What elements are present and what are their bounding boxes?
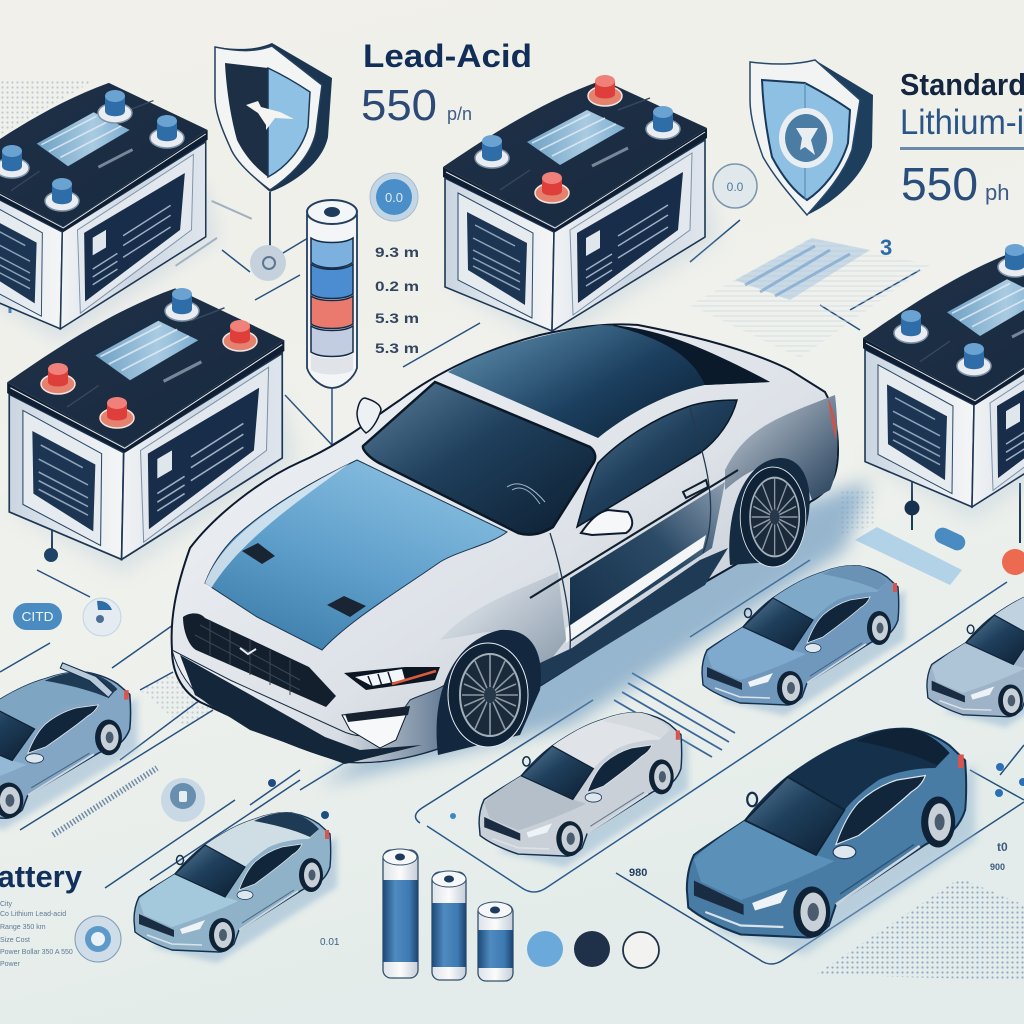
halftone dots: bottom right (815, 878, 1024, 980)
circle badge: right: 0.0 (727, 180, 744, 194)
headlight (344, 667, 440, 690)
hatch strip lower left (53, 768, 157, 835)
halftone dots: right side (840, 490, 875, 535)
battery: right (863, 248, 1024, 521)
number 3: 3 (880, 235, 892, 260)
circle badge: top center (370, 173, 418, 221)
divider under lithium heading (900, 147, 1024, 150)
hood vent left (242, 543, 275, 564)
car body (172, 324, 838, 762)
small car: large blue (687, 728, 975, 954)
battery text block: City (0, 901, 13, 908)
small car: lower left (134, 813, 337, 963)
circle badge: shield connector (250, 245, 286, 281)
battery: left front (7, 288, 298, 575)
connector lines and platforms (0, 192, 1024, 964)
value: lead-acid 550: p/n (447, 104, 472, 124)
front fender shading (440, 572, 566, 680)
battery text block: Co Lithium Lead-acid (0, 911, 66, 918)
small car: right blue (702, 566, 905, 716)
car shadow (320, 480, 870, 785)
shield: lead-acid (215, 43, 332, 192)
battery text block: Power (0, 961, 21, 968)
small label: right value: t0 (997, 840, 1008, 854)
door line (550, 408, 711, 650)
roof (448, 325, 770, 438)
front bumper (172, 650, 452, 763)
colour dot: navy (574, 931, 610, 967)
side mirror right (581, 510, 632, 535)
small label: cost near car: 980 (629, 867, 647, 879)
hood highlight (205, 463, 350, 590)
side character line (530, 470, 738, 598)
cylinder scale labels: 0.2 m (375, 278, 419, 294)
pill label: left CITD: CITD (22, 609, 54, 624)
rear spoiler (60, 663, 113, 698)
circle badge: top center: 0.0 (385, 190, 403, 205)
battery text block: Power Bollar 350 A 550 (0, 949, 73, 956)
small label: right value: 900 (990, 862, 1005, 872)
bottom cylinder: medium (432, 871, 466, 980)
terminals: left front battery (41, 288, 257, 428)
grille (183, 613, 336, 707)
small label: right value (990, 840, 1008, 872)
roof rear dark (610, 325, 770, 385)
rear quarter shading (725, 395, 837, 500)
terminals: right battery (894, 244, 1024, 376)
cylinder scale labels: 5.3 m (375, 310, 419, 326)
wiper arcs (507, 484, 545, 504)
colour dot: white (623, 932, 659, 968)
circle icon: left middle (83, 598, 121, 636)
small car: far left (0, 663, 138, 830)
lower front intake (342, 708, 409, 748)
circle badge: right (713, 164, 757, 208)
terminals: top center battery (475, 75, 680, 203)
main car: sports coupe (172, 324, 870, 785)
bottom cylinder: tall (383, 849, 418, 978)
grille mesh (195, 620, 300, 695)
cylinder scale labels: 9.3 m (375, 244, 419, 260)
side mirror left (357, 398, 381, 433)
value: lead-acid 550 (361, 81, 472, 130)
battery: top left (0, 83, 220, 343)
side window (577, 400, 737, 527)
value: lithium 550: 550 (901, 158, 978, 210)
battery text block: Range 350 km (0, 924, 46, 931)
circle icon: bottom left (75, 916, 121, 962)
battery text block: Size Cost (0, 937, 30, 944)
hatch lines (614, 673, 735, 757)
pill label: left CITD (13, 603, 62, 630)
white sill stripe (566, 535, 706, 643)
marker dots: connectors (44, 500, 1024, 819)
small label: lower left value: 0.01 (320, 937, 340, 948)
heading: lead-acid: Lead-Acid (363, 38, 532, 74)
cylinder scale labels: 5.3 m (375, 340, 419, 356)
cylinder scale labels (375, 244, 419, 356)
shield: lithium-ion (750, 60, 873, 215)
hood vent right (327, 596, 366, 617)
tail light (828, 398, 836, 440)
small car: silver (479, 713, 688, 867)
circle icon: lower left lock (161, 778, 205, 822)
colour dot: light blue (527, 931, 563, 967)
front wheel arch (437, 630, 541, 755)
pill badge: right (932, 525, 968, 553)
halftone dots: under main car left (140, 672, 213, 728)
hood (205, 460, 507, 650)
door panel lower (570, 482, 725, 642)
terminals: top left battery (0, 90, 184, 211)
bottom cylinder: short (478, 902, 513, 981)
windshield (363, 382, 595, 535)
battery: top center (443, 80, 720, 345)
pony badge (240, 648, 256, 654)
value: lead-acid 550: 550 (361, 81, 437, 130)
rear wheel arch (729, 458, 810, 565)
small labels: top left battery note (175, 200, 252, 267)
door handle (683, 480, 708, 498)
blueprint stripes panel (690, 238, 930, 358)
red badge: right (1002, 549, 1024, 575)
value: lithium 550: ph (985, 180, 1009, 205)
blue slip (855, 527, 962, 585)
small car: far right (927, 584, 1024, 727)
halftone dots: top left (0, 80, 95, 135)
battery text block (0, 901, 73, 968)
battery cell cylinder (307, 200, 357, 388)
lower sill dark (525, 548, 728, 692)
lower bumper lip (180, 655, 422, 764)
